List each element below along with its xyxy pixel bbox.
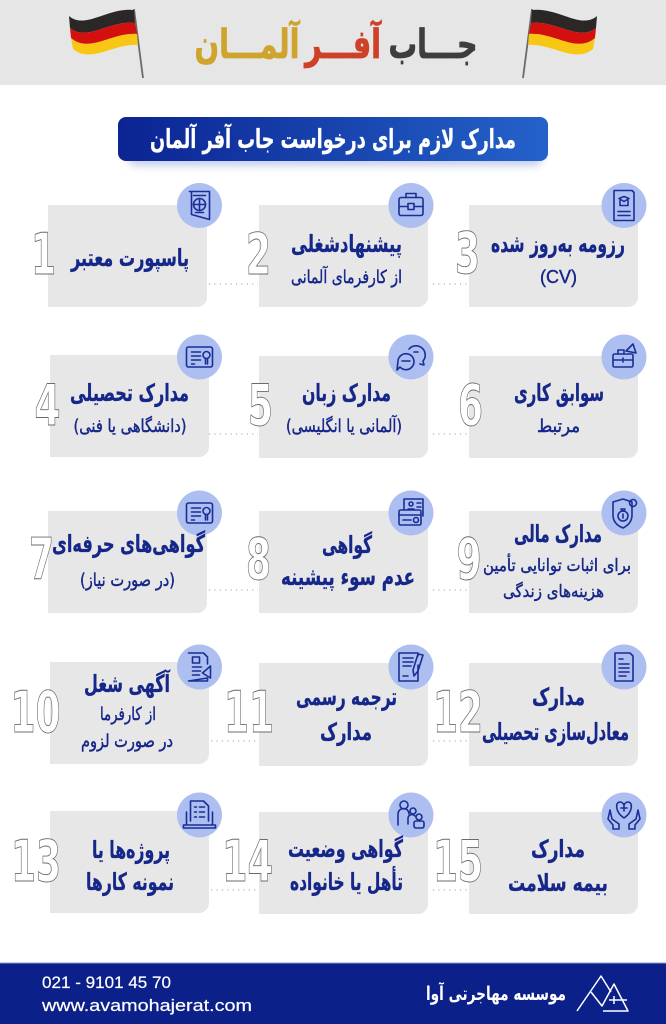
- card 6: work experience: سوابق کاری: [514, 379, 604, 407]
- banner heading: [118, 117, 548, 166]
- icon: id cards: [399, 499, 423, 525]
- card 11: official translation: [224, 644, 434, 766]
- card 10: job advertisement: [10, 644, 222, 764]
- number 8: 8: [246, 527, 271, 593]
- card 9: financial documents: هزینه‌های زندگی: [503, 581, 604, 602]
- title: [194, 19, 478, 68]
- card 2: job offer: [246, 183, 434, 307]
- card 5: language documents: مدارک زبان: [302, 379, 391, 407]
- icon: shield with money bag: [613, 499, 636, 528]
- icon: hands and heart: [608, 802, 640, 829]
- card 13: projects and samples: نمونه کارها: [86, 868, 174, 896]
- icon: logo: [577, 976, 628, 1011]
- card 11: official translation: ترجمه رسمی: [296, 683, 397, 711]
- card 15: health insurance: مدارک: [531, 835, 585, 863]
- number 7: 7: [29, 527, 54, 593]
- card 14: marital or family status: [222, 792, 434, 914]
- icon: laptop with list: [184, 801, 216, 828]
- card 12: credential equivalence: [433, 644, 646, 766]
- card 6: work experience: [458, 334, 646, 458]
- card 2: job offer: از کارفرمای آلمانی: [291, 265, 402, 288]
- card 4: academic documents: مدارک تحصیلی: [70, 379, 189, 407]
- contact details: www.avamohajerat.com: [41, 996, 252, 1015]
- title: جـــاب: [388, 22, 478, 68]
- card 9: financial documents: [456, 490, 646, 613]
- number 3: 3: [455, 221, 480, 287]
- number 1: 1: [31, 222, 56, 288]
- title: آفـــر: [304, 19, 382, 68]
- footer: [0, 962, 666, 1024]
- card 13: projects and samples: پروژه‌ها یا: [92, 836, 170, 864]
- icon: family: [398, 801, 424, 828]
- icon: left German flag: [69, 9, 143, 78]
- card 10: job advertisement: در صورت لزوم: [81, 731, 173, 752]
- number 15: 15: [433, 829, 483, 895]
- card 2: job offer: پیشنهادشغلی: [291, 230, 402, 258]
- number 14: 14: [222, 829, 273, 895]
- icon: briefcase: [399, 194, 423, 216]
- number 11: 11: [224, 680, 274, 746]
- card 4: academic documents: (دانشگاهی یا فنی): [74, 415, 186, 437]
- card 10: job advertisement: آگهی شغل: [84, 669, 171, 698]
- card 1: passport: [31, 183, 222, 307]
- icon: certificate: [186, 347, 212, 367]
- card 8: clean record certificate: [246, 490, 434, 613]
- contact details: 021 - 9101 45 70: [42, 973, 171, 992]
- number 5: 5: [248, 373, 273, 439]
- icon: speech bubbles: [397, 346, 425, 370]
- icon: document and pen: [399, 653, 423, 681]
- contact details: [41, 973, 252, 1015]
- card 3: resume: [455, 183, 646, 307]
- number 9: 9: [456, 527, 482, 593]
- card 7: professional certificates: (در صورت نیاز): [80, 570, 175, 591]
- card 5: language documents: [248, 334, 434, 458]
- card 5: language documents: (آلمانی یا انگلیسی): [286, 414, 402, 437]
- card 9: financial documents: مدارک مالی: [514, 520, 602, 548]
- card 8: clean record certificate: گواهی: [322, 531, 372, 559]
- icon: certificate: [186, 503, 212, 523]
- number 10: 10: [10, 680, 60, 746]
- card 14: marital or family status: گواهی وضعیت: [288, 835, 403, 863]
- card 13: projects and samples: [11, 792, 222, 913]
- card 8: clean record certificate: عدم سوء پیشینه: [281, 563, 415, 591]
- icon: briefcase with megaphone: [613, 344, 636, 367]
- organisation name: موسسه مهاجرتی آوا: [426, 981, 566, 1005]
- title: آلمـــان: [194, 19, 300, 68]
- card 15: health insurance: [433, 792, 646, 914]
- connector dots: [209, 284, 468, 890]
- card 7: professional certificates: گواهی‌های حرفه‌ای: [52, 530, 205, 558]
- icon: passport: [190, 192, 210, 220]
- card 1: passport: پاسپورت معتبر: [70, 244, 189, 272]
- icon: right German flag: [523, 9, 597, 78]
- number 6: 6: [458, 373, 483, 439]
- card 10: job advertisement: از کارفرما: [100, 704, 156, 725]
- card 14: marital or family status: تأهل یا خانواده: [290, 866, 403, 896]
- number 13: 13: [11, 829, 61, 895]
- card 6: work experience: مرتبط: [537, 416, 580, 437]
- card 7: professional certificates: [29, 490, 222, 613]
- card 9: financial documents: برای اثبات توانایی تأمین: [483, 553, 631, 576]
- card 15: health insurance: بیمه سلامت: [508, 869, 608, 897]
- header band: [0, 0, 666, 85]
- icon: job advert document: [188, 653, 210, 681]
- card 12: credential equivalence: مدارک: [532, 683, 585, 711]
- card 11: official translation: مدارک: [320, 718, 372, 746]
- number 2: 2: [246, 222, 271, 288]
- icon: resume: [614, 190, 634, 220]
- card 3: resume: (CV): [540, 267, 577, 287]
- icon: document: [615, 653, 633, 681]
- card 4: academic documents: [34, 334, 222, 457]
- number 12: 12: [433, 680, 483, 746]
- number 4: 4: [34, 373, 60, 439]
